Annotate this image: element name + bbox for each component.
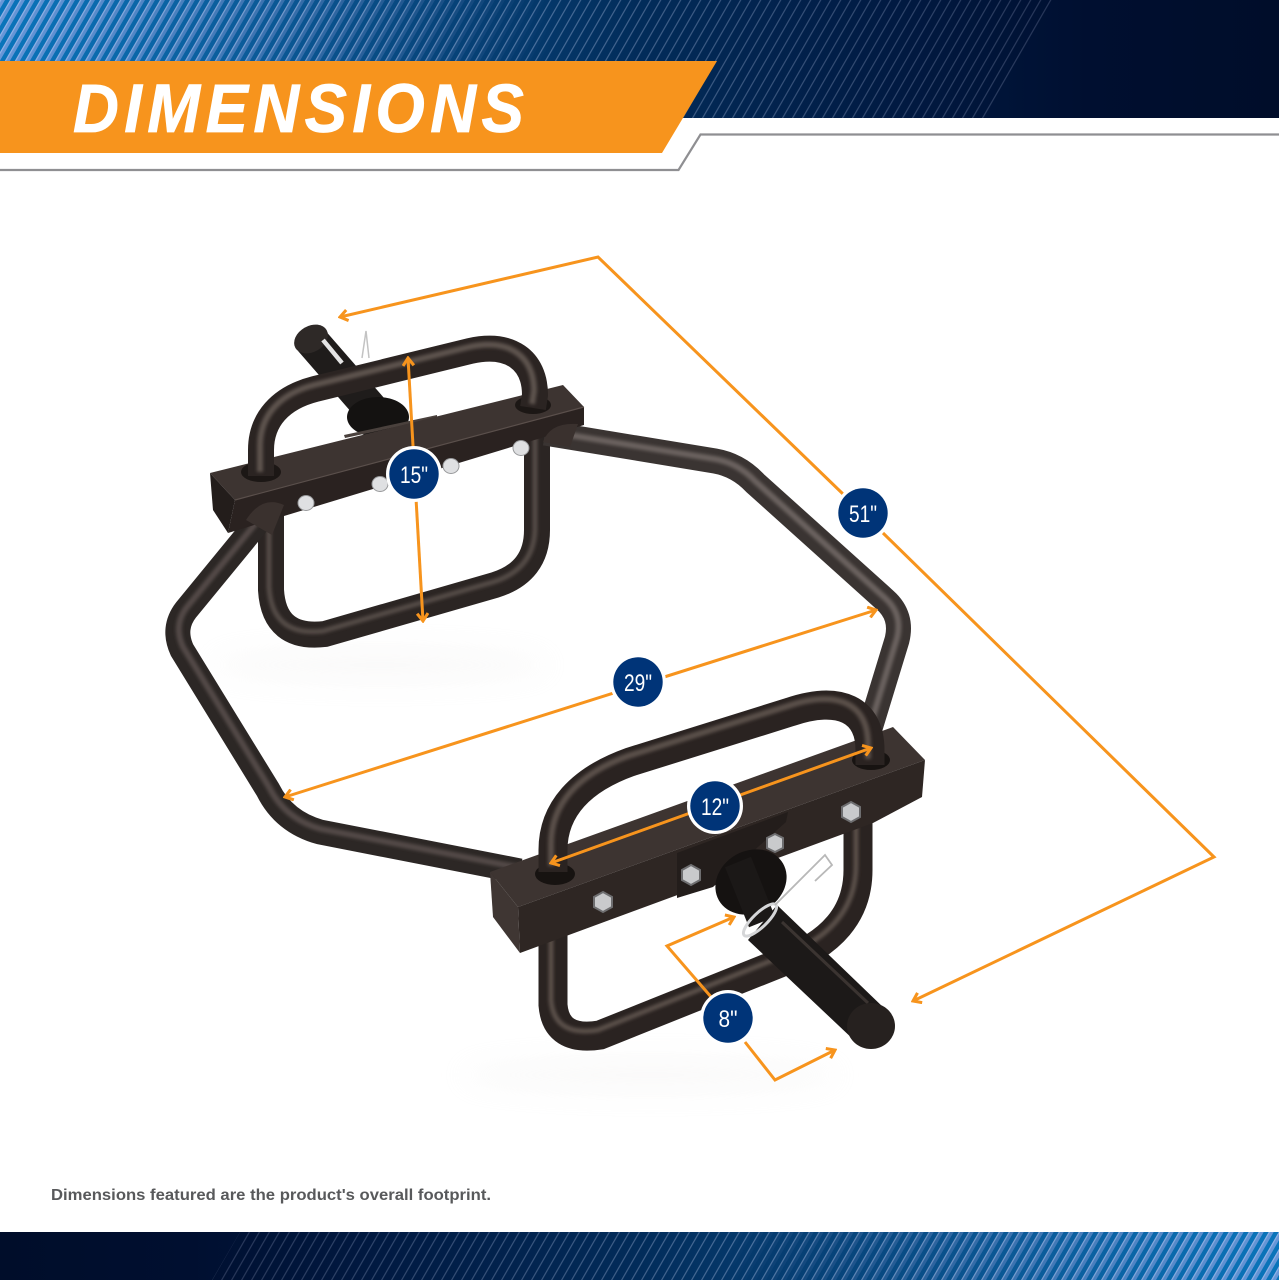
badge: 15 inches: 15" bbox=[400, 462, 428, 489]
lower handle bottom loop bbox=[551, 795, 858, 1036]
header white strip with grey outline bbox=[0, 118, 1279, 170]
frame left tube bbox=[178, 507, 521, 871]
badge: 12 inches: 12" bbox=[701, 794, 729, 821]
upper handle lower loop bbox=[269, 422, 537, 635]
footer band with stripes bbox=[0, 1232, 1279, 1280]
badge: 51 inches bbox=[835, 485, 891, 541]
arrow: 15 inch dimension bbox=[408, 358, 423, 621]
arrow: 29 inch dimension bbox=[285, 610, 876, 797]
lower crossbar box bbox=[490, 727, 925, 953]
lower bolts bbox=[594, 802, 860, 912]
badge: 15 inches bbox=[386, 446, 442, 502]
title banner bbox=[0, 61, 717, 153]
upper handle shaft bbox=[289, 319, 437, 438]
arrow: 12 inch dimension bbox=[551, 748, 871, 863]
badge: 12 inches bbox=[687, 778, 743, 834]
arrow: 8 inch dimension upper bbox=[667, 917, 734, 998]
title banner: DIMENSIONS bbox=[73, 71, 524, 148]
badge: 29 inches: 29" bbox=[624, 670, 652, 697]
upper handle top loop bbox=[260, 345, 535, 476]
arrow: 8 inch dimension lower bbox=[745, 1042, 835, 1080]
badge: 8 inches: 8" bbox=[718, 1006, 738, 1033]
frame right tube bbox=[545, 431, 898, 735]
footnote: Dimensions featured are the product's overall footprint. bbox=[51, 1187, 491, 1204]
upper crossbar box bbox=[210, 385, 584, 535]
badge: 29 inches bbox=[610, 654, 666, 710]
header band with stripes bbox=[0, 0, 1279, 118]
floor shadows bbox=[210, 647, 840, 1093]
arrow: 51 inch dimension bbox=[340, 257, 843, 494]
upper bolts bbox=[298, 440, 529, 510]
lower handle shaft bbox=[703, 837, 895, 1049]
arrow: 51 inch dimension lower bbox=[883, 533, 1214, 1001]
badge: 8 inches bbox=[700, 990, 756, 1046]
product: hex trap bar bbox=[178, 319, 925, 1049]
lower handle top loop bbox=[551, 699, 870, 872]
badge: 51 inches: 51" bbox=[849, 501, 877, 528]
